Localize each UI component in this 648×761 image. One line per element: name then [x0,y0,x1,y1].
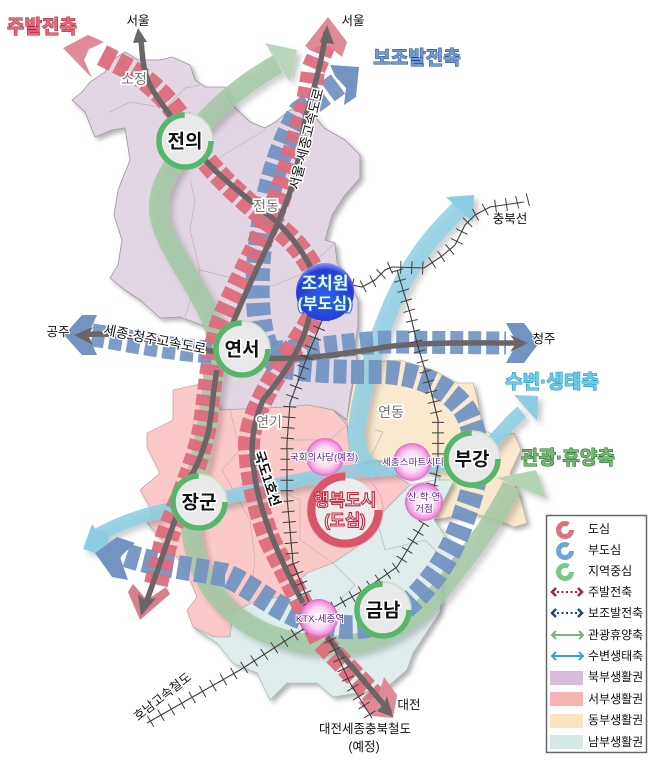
legend: regional centre [558,564,632,578]
label: Yeondong: 연동 [378,404,404,420]
label: Seoul west: 서울 [126,14,150,28]
arrowhead: blue west [64,315,97,355]
arrowhead: green north [265,43,297,82]
road: Sejong–Cheongju expressway [82,334,522,358]
label: Cheongju: 청주 [532,332,556,346]
node: Sejong smart city: 세종스마트시티 [382,458,444,468]
heading: waterfront axis: 수변·생태축 [505,371,599,393]
node: Janggun [171,474,227,530]
heading: secondary axis: 보조발전축 [373,47,461,69]
axis: waterfront ecology (cyan) [83,195,538,553]
arrowhead: Daejeon [377,696,393,717]
internal district boundaries [110,85,445,600]
legend: east zone: 동부생활권 [588,713,643,727]
heading: tourism axis: 관광·휴양축 [521,447,615,469]
arrowhead: blue north [330,65,359,105]
roads (grey arrows) [74,25,528,717]
axis: tourism and recreation (green) [159,43,546,646]
node: industry-academia hub: 산·학·연 [408,492,440,503]
rail: Honam high-speed line [144,628,305,725]
road: Seoul–Sejong expressway [145,32,326,606]
label: Yeongi: 연기 [256,414,282,430]
node: Yeonseo: 연서 [225,338,259,360]
node: Haengbok city centre: (도심) [324,511,366,530]
legend: north zone: 북부생활권 [588,670,643,684]
legend: south zone: 남부생활권 [588,735,643,749]
arrowhead: Cheongju [510,335,528,352]
label: National route 1: 국도1호선 [251,449,283,508]
node: Jochiwon sub-centre: (부도심) [298,295,352,313]
legend: west zone: 서부생활권 [588,692,643,706]
axis: secondary development (blue dashed) [64,65,539,627]
node: Jeonui: 전의 [168,130,202,152]
legend [546,516,646,752]
label: planned: (예정) [348,740,380,754]
legend: west zone [550,692,643,706]
arrowhead: cyan north [446,195,474,222]
legend: sub-centre: 부도심 [588,543,621,557]
arrowhead: red south-east [358,677,397,718]
node: industry-academia hub [405,483,443,521]
node: Bugang: 부강 [455,448,489,470]
legend: city centre: 도심 [588,522,610,536]
label: Jeondong: 전동 [253,198,279,214]
region: eastern living zone [347,360,527,527]
node: industry-academia hub: 거점 [415,503,433,515]
legend: primary axis: 주발전축 [588,585,632,599]
node: Janggun: 장군 [182,492,216,514]
node: Jochiwon sub-centre: 조치원 [302,274,348,293]
arrowhead: Seoul north [320,25,334,44]
node: Yeonseo [214,321,270,377]
heading: primary axis: 주발전축 [7,16,77,38]
node: National Assembly [290,438,358,476]
legend: primary axis [552,585,632,599]
rail: Chungbuk line [352,199,530,287]
region: southern living zone [193,480,457,700]
arrowhead: cyan north-east [514,395,538,421]
label: Honam high-speed rail: 호남고속철도 [131,670,194,724]
node: Haengbok city centre [307,472,383,548]
legend: north zone [550,670,643,685]
arrowhead: Seoul [133,28,147,43]
node: KTX Sejong station [296,599,344,637]
legend: waterfront axis [552,649,643,663]
road: Seoul–Sojeong–Jeonui–Jochiwon–Yeongi–Daejeon [141,40,390,712]
legend: regional centre: 지역중심 [588,564,632,578]
node: National Assembly: 국회의사당(예정) [290,452,358,464]
arrowhead: Gongju [74,327,93,345]
legend: secondary axis [552,606,643,620]
node: Bugang [444,431,500,487]
node: Haengbok city centre: 행복도시 [314,491,376,510]
arrowhead: green east [497,470,546,498]
railway lines [144,199,530,725]
arrowhead: red north [305,17,347,57]
label: Chungbuk line: 충북선 [493,212,527,226]
legend: south zone [550,735,643,749]
node: Geumnam: 금남 [366,600,400,622]
axis: primary development (red dashed) [63,17,397,718]
arrowhead: cyan south-west [83,524,110,553]
node: KTX Sejong station: KTX-세종역 [296,614,344,625]
arrowhead: blue east [506,323,539,363]
node: Geumnam [355,582,411,638]
node: Sejong smart city [382,443,444,481]
arrowhead: red north-west [63,35,104,78]
map regions [72,52,527,700]
rail: central loop line [325,270,438,612]
label: Daejeon-Sejong-Chungbuk rail: 대전세종충북철도 [319,722,411,736]
node: Jeonui [157,113,213,169]
arrowhead: blue south-west [95,537,135,580]
legend: secondary axis: 보조발전축 [588,606,643,620]
label: Gongju: 공주 [46,325,70,339]
legend: tourism axis [552,628,643,642]
region: western living zone [140,383,410,637]
arrowhead: Janggun south [138,594,156,616]
label: Sejong-Cheongju expressway: 세종-청주고속도로 [102,322,207,357]
legend: tourism axis: 관광휴양축 [588,628,643,642]
label: Seoul-Sejong expressway: 서울-세종고속도로 [287,87,326,191]
label: Daejeon: 대전 [397,698,421,712]
node: Jochiwon sub-centre [296,263,354,321]
legend: sub-centre [558,543,621,558]
rail: Daejeon–Sejong–Chungbuk line [287,318,372,718]
legend: waterfront axis: 수변생태축 [588,649,643,663]
legend: city centre [558,522,610,536]
legend: east zone [550,713,643,728]
arrowhead: red south-west [128,584,170,620]
label: Seoul east: 서울 [341,14,365,28]
label: Sojeong: 소정 [121,71,147,87]
region: northern living zone [72,52,360,420]
